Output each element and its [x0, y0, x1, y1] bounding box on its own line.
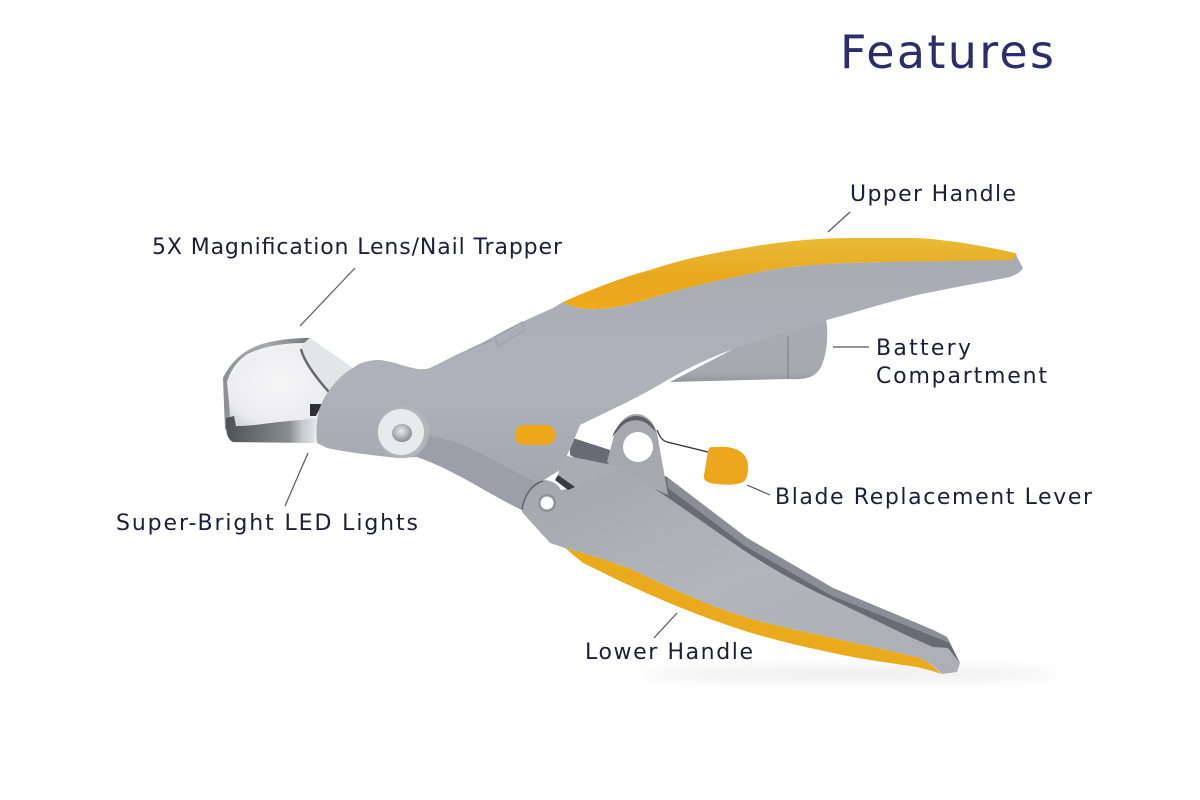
label: Super-Bright LED Lights: Super-Bright LED Lights: [116, 511, 418, 536]
label: 5X Magnification Lens/Nail Trapper: 5X Magnification Lens/Nail Trapper: [152, 235, 563, 260]
label: Super-Bright LED Lights: [116, 453, 418, 536]
lower handle body: [522, 468, 960, 674]
light block between pivots: [558, 455, 622, 492]
dark inner channel of lower handle: [570, 437, 960, 663]
label: Blade Replacement Lever: Blade Replacement Lever: [775, 485, 1093, 510]
blade lever arm with hole: [607, 414, 668, 495]
battery compartment: [670, 318, 827, 382]
upper handle body: [316, 255, 1023, 510]
ground shadow: [640, 669, 1060, 679]
label: 5X Magnification Lens/Nail Trapper: [152, 235, 563, 326]
orange button on body: [515, 425, 555, 445]
label: Lower Handle: Lower Handle: [585, 640, 753, 665]
pivot seam: [522, 481, 543, 510]
magnification lens: [223, 338, 353, 443]
dark wedge at pivot: [555, 475, 575, 490]
top button outline: [468, 322, 524, 350]
label: Lower Handle: [585, 613, 753, 665]
lens hinge pivot disc: [377, 406, 429, 458]
title: Features: [840, 25, 1054, 79]
label: Battery Compartment: Battery: [876, 336, 971, 361]
label: Battery Compartment: Compartment: [876, 364, 1047, 389]
upper handle yellow grip: [563, 238, 1017, 309]
lower handle yellow grip: [565, 548, 941, 674]
lower pivot rivet: [538, 494, 556, 512]
outer rail of lower handle: [667, 477, 950, 643]
blade replacement lever yellow tab: [657, 430, 748, 485]
label: Upper Handle: Upper Handle: [850, 182, 1016, 207]
label: Upper Handle: [828, 182, 1016, 232]
shaded lower body panel: [417, 436, 540, 510]
label: Battery Compartment: [833, 336, 1047, 389]
nail clipper product illustration: [223, 238, 1023, 674]
